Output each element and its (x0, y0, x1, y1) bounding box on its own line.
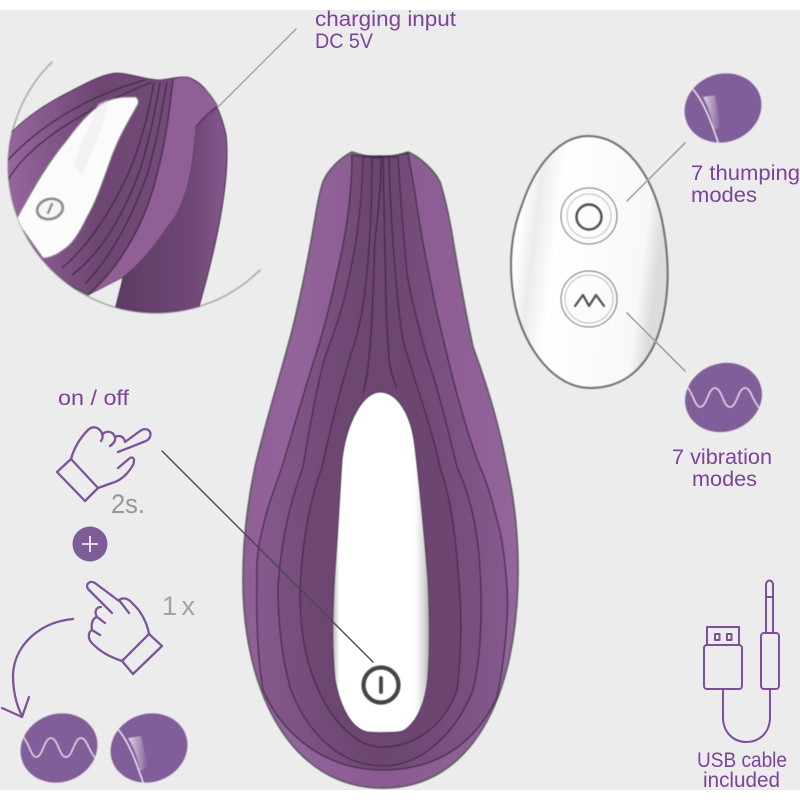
callout line: vibration (627, 313, 685, 371)
icon: vibration blob right (684, 362, 763, 433)
two seconds label: 2s. (111, 489, 145, 519)
one time label: 1 x (162, 591, 196, 621)
vibration label line one: 7 vibration (672, 446, 772, 469)
thumping label line two: modes (691, 184, 757, 207)
icon: hand pressing two seconds (57, 427, 150, 501)
remote shell (511, 136, 668, 388)
charging port seam (196, 107, 217, 127)
groove band three (300, 157, 461, 747)
front section (0, 73, 218, 295)
device outer body (243, 152, 518, 788)
power icon (364, 668, 398, 702)
remote control (511, 136, 668, 388)
bottom margin (0, 790, 800, 800)
shoulder highlight (88, 77, 218, 295)
power icon close-up (35, 196, 65, 222)
callout line: charging input (218, 29, 296, 107)
silver button (333, 392, 430, 733)
USB label line one: USB cable (697, 749, 787, 772)
icon: hand pressing once (87, 582, 162, 674)
icon: thumping blob top right (684, 72, 762, 144)
thumping label line one: 7 thumping (691, 162, 800, 185)
on off label: on / off (58, 387, 129, 410)
callout line: power button (162, 451, 373, 662)
USB label line two: included (703, 769, 780, 792)
button shine (74, 100, 108, 175)
close-up grooves (8, 80, 173, 295)
vibration button (561, 271, 617, 327)
inset panel: charging input close-up (0, 62, 260, 320)
icon: USB cable (704, 580, 779, 742)
icon: plus badge (72, 526, 108, 562)
charging input label: charging input (315, 8, 456, 31)
clipped device close-up (0, 73, 227, 320)
groove band two (278, 157, 481, 766)
back section (113, 77, 227, 320)
icon: vibration blob bottom left (20, 712, 98, 784)
arrow: next mode (2, 619, 73, 717)
inset circle arc (8, 62, 260, 313)
callout line: thumping (627, 143, 685, 201)
groove band one (257, 153, 508, 770)
vibration label line two: modes (692, 468, 757, 491)
main device illustration (243, 152, 518, 788)
charging DC label: DC 5V (315, 30, 373, 53)
silver button close-up (16, 97, 138, 258)
center groove lines (363, 157, 397, 393)
icon: thumping blob bottom left (110, 712, 188, 784)
thumping button (561, 188, 617, 244)
